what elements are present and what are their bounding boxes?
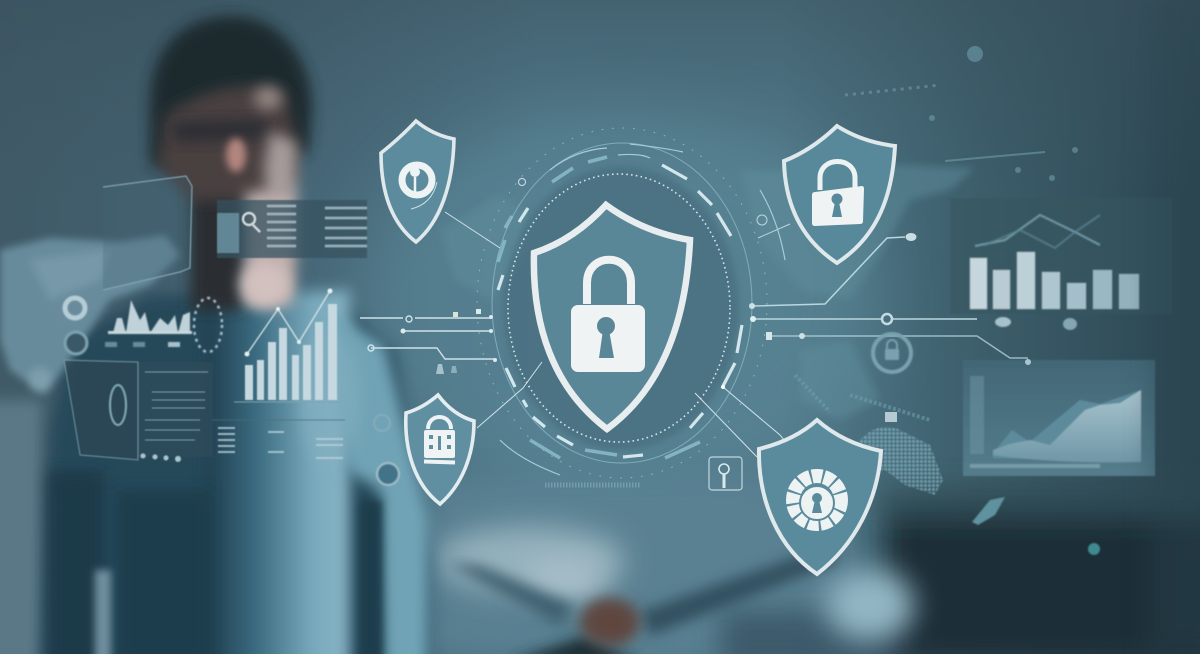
- Indonesia chain: [795, 375, 930, 420]
- gear globe icons on left: [65, 298, 222, 354]
- world map, centre and right: [440, 46, 1100, 555]
- lower-left gear data panel: [64, 360, 213, 462]
- dark desk band, lower right: [720, 485, 1200, 654]
- shield: bottom-right gear keyhole: [759, 420, 881, 574]
- trend line: [244, 288, 332, 356]
- upper-left chart panel outline: [103, 176, 192, 290]
- lower data tables: [212, 420, 345, 458]
- main shield: [534, 205, 690, 429]
- chart bars: [245, 304, 337, 400]
- trend lines: [975, 215, 1100, 246]
- right bar chart panel: [950, 198, 1172, 330]
- soft vignette, right edge: [1150, 0, 1200, 654]
- world map, left holographic: [0, 235, 180, 395]
- bright dash segments: [498, 165, 742, 457]
- upper data panel: [217, 200, 367, 258]
- blurred person: [42, 16, 430, 654]
- right area chart panel: [963, 360, 1155, 476]
- person: neck and head: [150, 16, 312, 310]
- bars: [970, 252, 1139, 309]
- New Zealand: [972, 497, 1005, 525]
- Australia: [860, 427, 943, 495]
- speck lights: [929, 46, 1078, 181]
- bottom faint ticker: [545, 482, 640, 488]
- blurred table and hand, bottom centre: [435, 526, 914, 654]
- main shield with padlock: [534, 205, 690, 429]
- person: torso and sleeves: [42, 290, 430, 654]
- padlock: [571, 260, 645, 372]
- shield connector lines: [445, 178, 808, 470]
- shield: top-left keyhole ring: [381, 121, 454, 242]
- circuit lines, right: [749, 215, 1031, 365]
- darker inner disc: [503, 166, 739, 450]
- circuit lines, left: [360, 309, 497, 362]
- small key badge, lower centre: [709, 457, 742, 490]
- dotted ring: [508, 174, 730, 442]
- small round icons near shoulder: [374, 415, 399, 485]
- small bell icons: [436, 364, 457, 374]
- shield: bottom-left code lock: [406, 395, 474, 504]
- shield: top-right padlock: [784, 126, 895, 263]
- faint lock badge, right: [873, 334, 911, 372]
- left rising bar chart: [234, 288, 340, 402]
- small white bar chart on left: [105, 300, 192, 347]
- outer thin ring: [492, 143, 752, 463]
- circular HUD: [477, 128, 785, 478]
